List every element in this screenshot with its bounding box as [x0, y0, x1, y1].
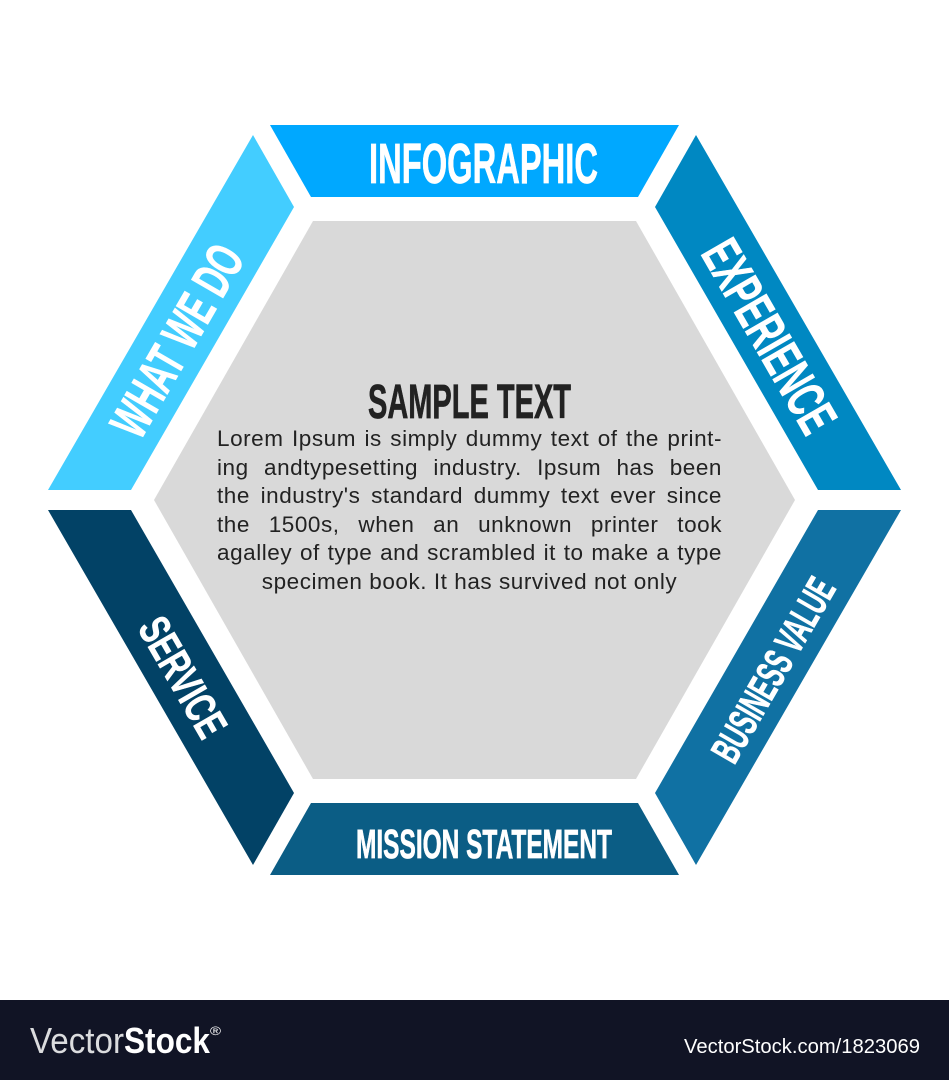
segment: business value: BUSINESS VALUE: [702, 570, 845, 770]
segment: business value: [655, 510, 901, 865]
segment: experience: EXPERIENCE: [690, 229, 848, 444]
footer logo: Stock: [124, 1020, 211, 1061]
body text: agalley of type and scrambled it to make a type: [217, 540, 722, 565]
footer logo: ®: [210, 1024, 221, 1038]
segment: experience: [655, 135, 901, 490]
footer logo: Vector: [30, 1020, 124, 1061]
segment: infographic: INFOGRAPHIC: [369, 132, 598, 196]
heading: sample text: SAMPLE TEXT: [368, 376, 571, 429]
footer id: VectorStock.com/1823069: [684, 1036, 920, 1058]
segment: service: [48, 510, 294, 865]
body text: the industry's standard dummy text ever since: [217, 483, 722, 508]
body text: specimen book. It has survived not only: [262, 568, 677, 594]
body text: the 1500s, when an unknown printer took: [217, 512, 722, 536]
body text: [217, 426, 722, 594]
segment: service: SERVICE: [128, 608, 236, 746]
segment: mission statement: MISSION STATEMENT: [356, 821, 612, 867]
footer bar: [0, 1000, 949, 1080]
segment: what we do: [48, 135, 294, 490]
body text: ing andtypesetting industry. Ipsum has been: [217, 454, 722, 480]
segment: what we do: WHAT WE DO: [99, 235, 256, 448]
footer logo: [30, 1020, 221, 1061]
segment: mission statement: [270, 803, 679, 875]
segment: infographic: [270, 125, 679, 197]
body text: Lorem Ipsum is simply dummy text of the print-: [217, 426, 722, 451]
panel: central grey hexagon: [154, 221, 795, 779]
